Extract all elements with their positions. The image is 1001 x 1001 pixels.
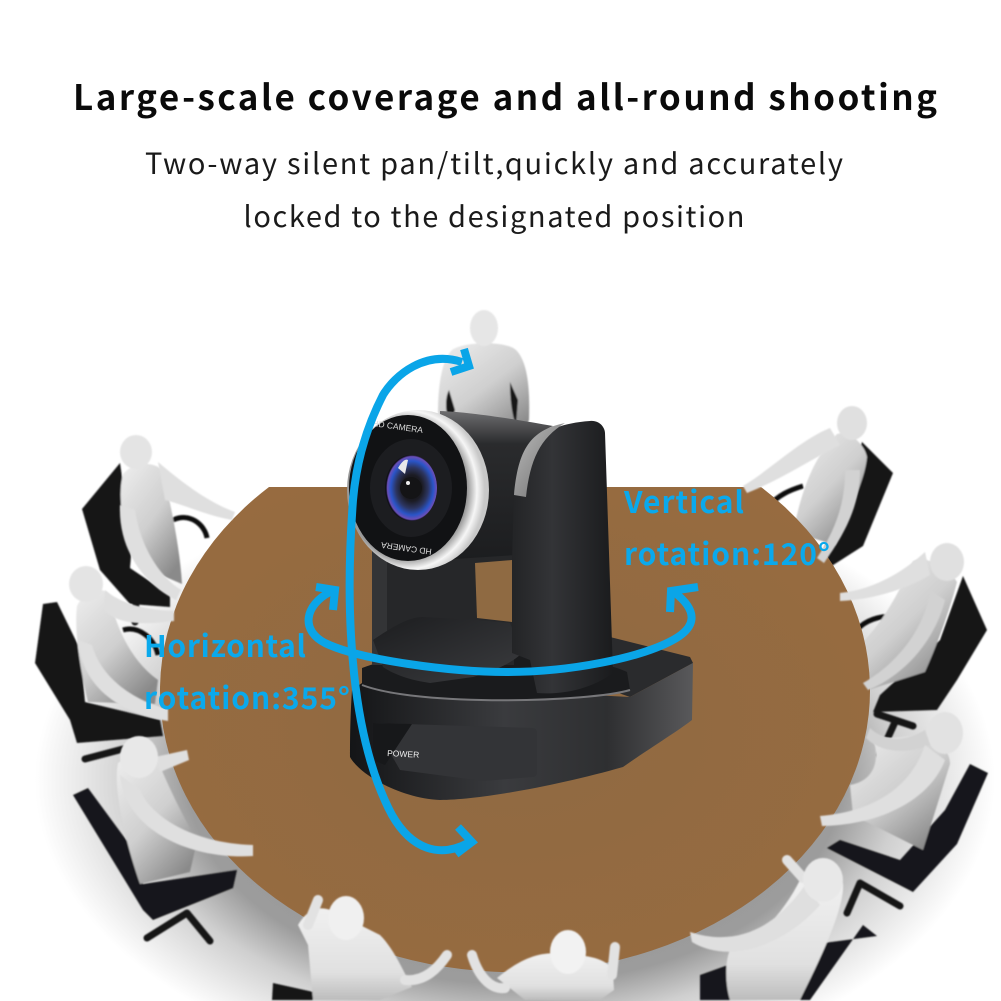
camera window: [475, 560, 512, 622]
camera base top surface: [610, 637, 693, 697]
person: upper right, chair and body: [768, 406, 893, 569]
camera: [347, 410, 693, 800]
camera base ring: [362, 653, 630, 700]
camera yoke arm: [512, 421, 613, 693]
title: Large-scale coverage and all-round shooting: [73, 70, 937, 121]
camera turret cap: [373, 617, 522, 683]
label: horizontal rotation: rotation:355°: [144, 674, 350, 718]
camera base front panel: [373, 723, 537, 781]
camera base: [350, 663, 693, 800]
label: vertical rotation: rotation:120°: [624, 530, 830, 574]
label: horizontal rotation: Horizontal: [144, 622, 306, 666]
person: right upper middle, chair and body: [857, 543, 987, 755]
person: upper right, arms: [743, 428, 860, 563]
person: top, body: [438, 310, 529, 440]
power label: POWER: [387, 748, 419, 760]
HD camera labels: HD CAMERA: [372, 418, 424, 435]
person: bottom left: [272, 896, 447, 1000]
person: upper left, chair and body: [82, 435, 207, 622]
subtitle: Two-way silent pan/tilt,quickly and accurately: [145, 141, 843, 183]
person: upper left, arms: [120, 462, 235, 600]
person: lower left, chair and body: [73, 755, 237, 941]
label: vertical rotation: Vertical: [623, 478, 744, 522]
label: horizontal rotation: [144, 622, 350, 718]
label: vertical rotation: [623, 478, 830, 574]
person: lower right: [690, 858, 877, 1000]
subtitle: [145, 141, 843, 236]
subtitle: locked to the designated position: [244, 194, 744, 236]
person: right upper middle, arms: [840, 552, 945, 690]
person: right lower middle, arms: [820, 728, 945, 826]
camera head: [440, 411, 553, 560]
lens ring: [347, 410, 489, 570]
person: lower left, arms and head: [120, 736, 253, 856]
arrow: horizontal rotation: [309, 587, 698, 672]
person: bottom centre: [472, 930, 615, 1000]
floor shadow: [0, 460, 1001, 1001]
camera: HD CAMERA: [380, 540, 432, 557]
person: right lower middle, chair and body: [827, 712, 988, 913]
arrow: vertical rotation: [350, 349, 472, 854]
conference table: [160, 487, 870, 972]
person: left middle, arms: [78, 590, 174, 721]
person: left middle, chair and body: [35, 566, 163, 759]
lens glass: [385, 455, 437, 521]
camera rear panel: [372, 530, 514, 665]
